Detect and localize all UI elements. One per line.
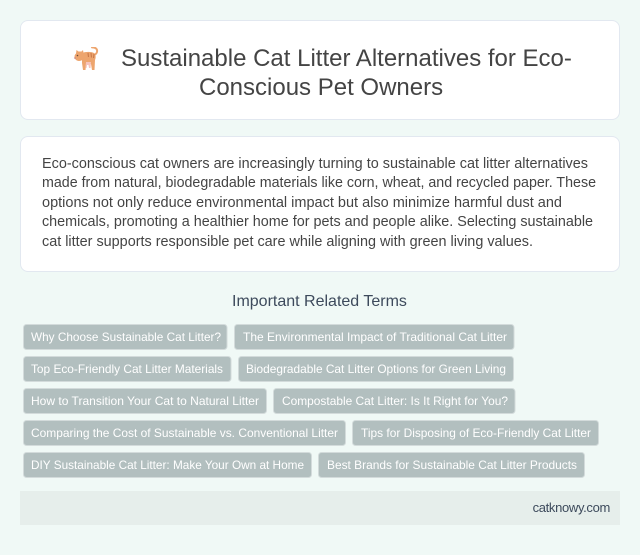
heading: related terms: Important Related Terms bbox=[232, 293, 407, 310]
tag: Biodegradable Cat Litter Options for Green Living bbox=[246, 362, 506, 376]
tag: Best Brands for Sustainable Cat Litter Products bbox=[327, 458, 577, 472]
tag list bbox=[23, 324, 599, 478]
heading: Sustainable Cat Litter Alternatives for Eco- bbox=[121, 45, 572, 72]
description text: made from natural, biodegradable materials like corn, wheat, and recycled paper. These bbox=[42, 174, 596, 191]
tag bbox=[274, 388, 515, 414]
panel: title card bbox=[20, 20, 620, 120]
tag: How to Transition Your Cat to Natural Litter bbox=[31, 394, 259, 408]
description text: cat litter supports responsible pet care while aligning with green living values. bbox=[42, 233, 533, 250]
source: catknowy.com bbox=[533, 500, 610, 515]
description text: options not only reduce environmental impact but also minimize harmful dust and bbox=[42, 194, 562, 211]
description text bbox=[42, 155, 596, 250]
heading: Conscious Pet Owners bbox=[199, 74, 443, 101]
tag bbox=[318, 452, 584, 478]
icon: cat bbox=[74, 47, 98, 70]
tag: DIY Sustainable Cat Litter: Make Your Own at Home bbox=[31, 458, 304, 472]
footer bbox=[20, 491, 620, 525]
tag: Compostable Cat Litter: Is It Right for You? bbox=[282, 394, 508, 408]
tag bbox=[24, 420, 346, 446]
tag: The Environmental Impact of Traditional Cat Litter bbox=[243, 330, 507, 344]
description text: chemicals, promoting a healthier home for pets and people alike. Selecting sustainable bbox=[42, 213, 593, 230]
heading bbox=[121, 45, 572, 101]
description text: Eco-conscious cat owners are increasingly turning to sustainable cat litter alternatives bbox=[42, 155, 588, 172]
panel: description bbox=[20, 136, 620, 272]
tag: Tips for Disposing of Eco-Friendly Cat Litter bbox=[361, 426, 591, 440]
tag bbox=[24, 356, 231, 382]
tag bbox=[238, 356, 514, 382]
tag bbox=[352, 420, 598, 446]
tag: Why Choose Sustainable Cat Litter? bbox=[31, 330, 221, 344]
tag: Top Eco-Friendly Cat Litter Materials bbox=[31, 362, 223, 376]
tag: Comparing the Cost of Sustainable vs. Conventional Litter bbox=[31, 426, 338, 440]
tag bbox=[24, 388, 266, 414]
tag bbox=[234, 324, 514, 350]
tag bbox=[24, 452, 312, 478]
tag bbox=[24, 324, 227, 350]
